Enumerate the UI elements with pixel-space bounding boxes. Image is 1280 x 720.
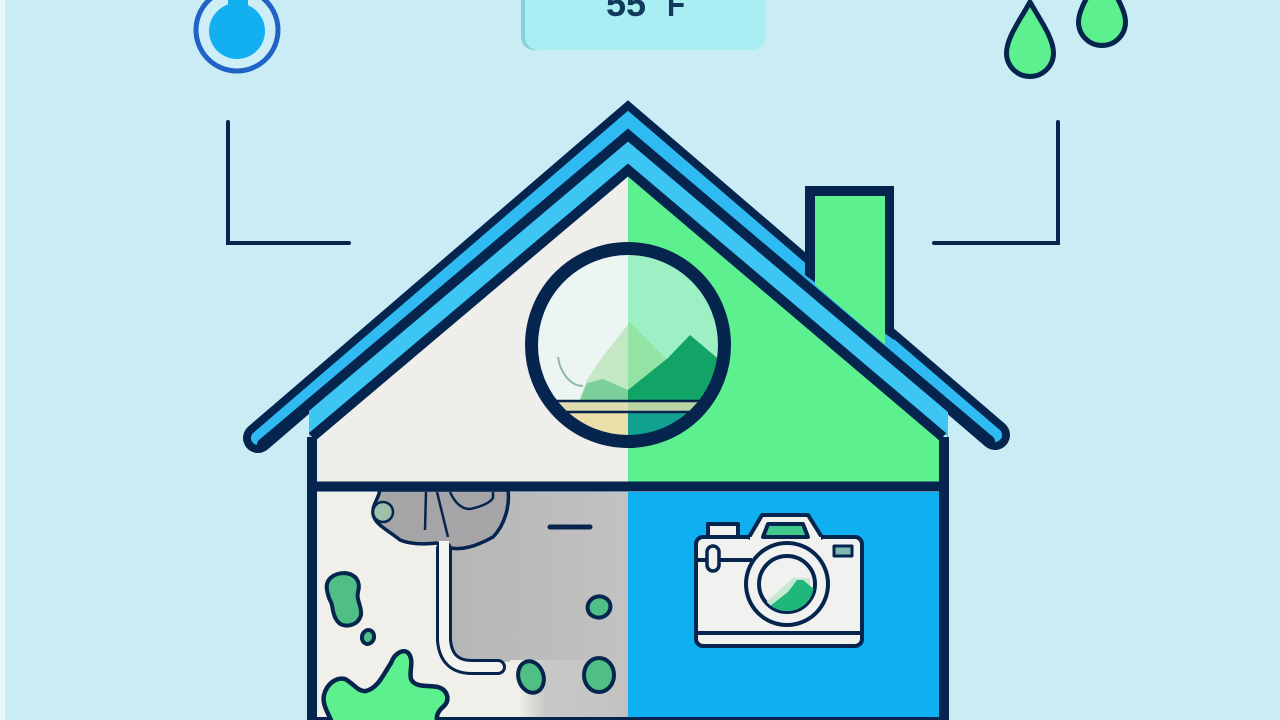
attic wall: [312, 170, 943, 486]
right bracket: [934, 122, 1058, 243]
lower room right: [628, 492, 940, 720]
roof dark lines: [262, 135, 990, 444]
round window: [530, 248, 728, 442]
wall dash: [550, 524, 590, 530]
icon: camera: [696, 515, 862, 646]
roof outer band: [258, 120, 995, 438]
temperature panel: [521, 0, 765, 50]
mold spots: [327, 573, 614, 696]
house: [258, 120, 995, 720]
lower room left: [317, 492, 628, 720]
mold stain: ceiling patch: [373, 490, 508, 549]
left bracket: [228, 122, 349, 243]
mold splat: [324, 651, 447, 720]
roof inner band: [309, 135, 948, 437]
icon: water drops: [1006, 0, 1126, 76]
drip pipe: [439, 541, 498, 667]
icon: thermometer bulb: [196, 0, 278, 71]
chimney: [805, 186, 894, 345]
walls and floor: [307, 437, 949, 720]
